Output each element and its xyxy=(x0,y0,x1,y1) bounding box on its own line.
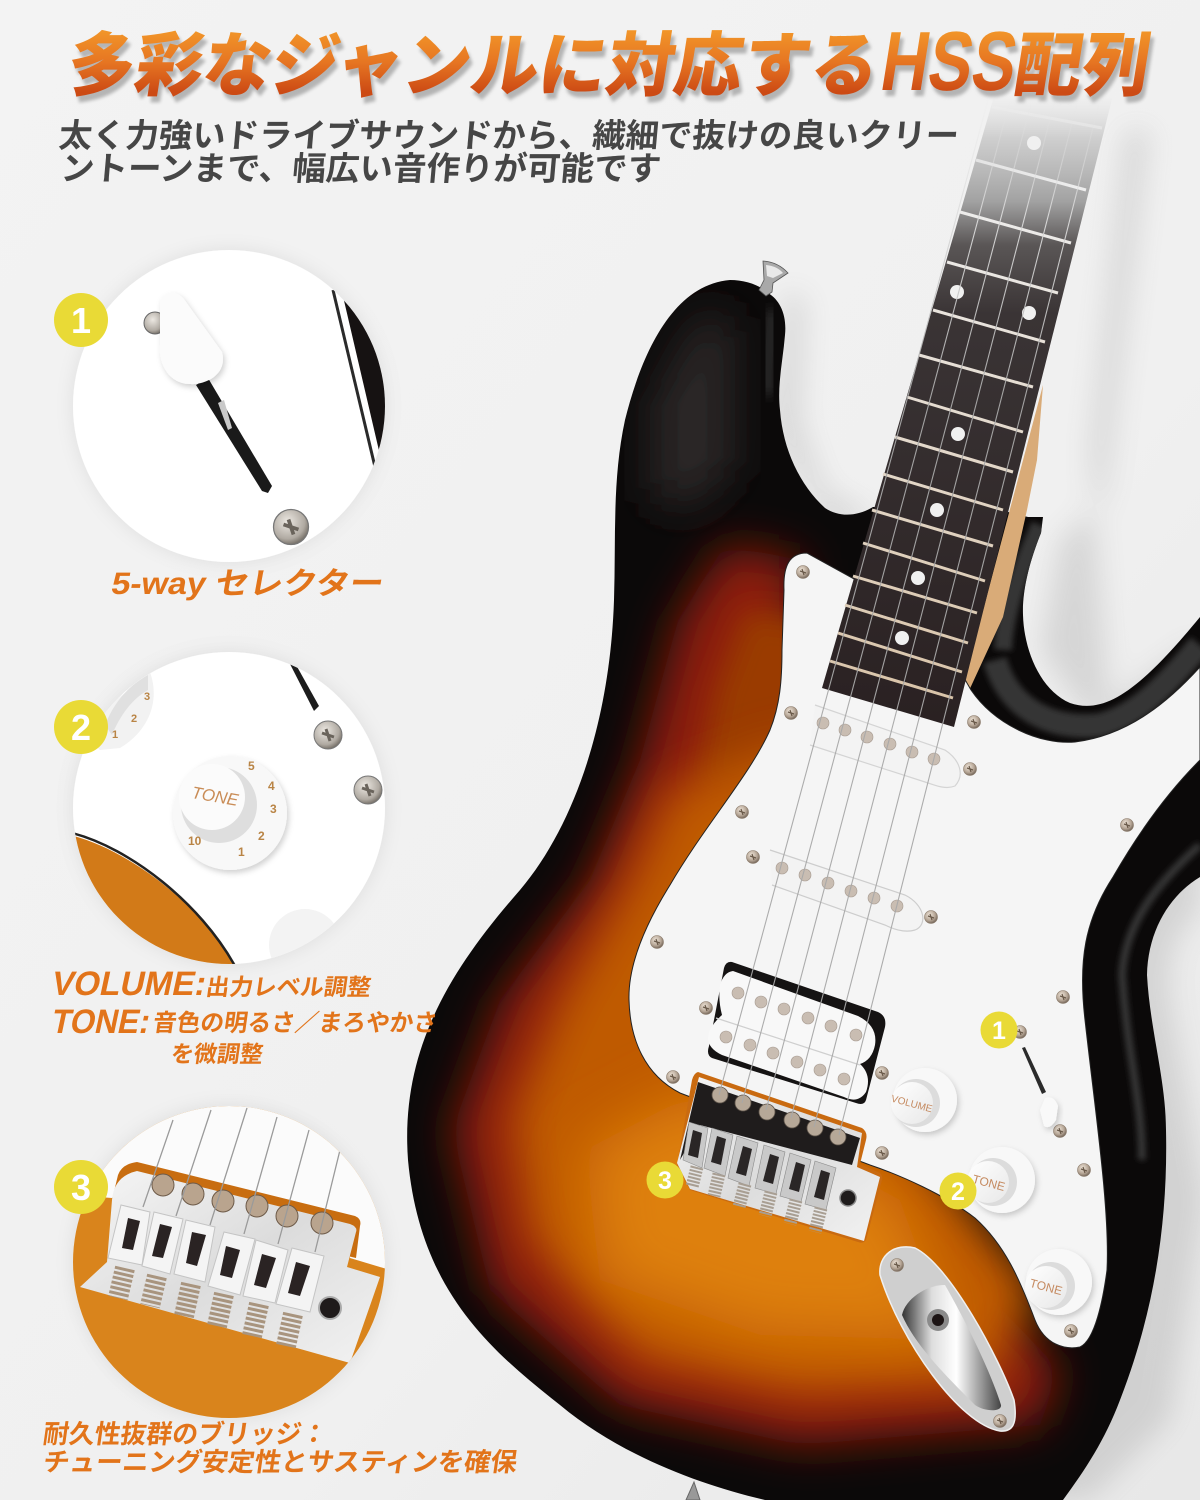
tone knob skirt xyxy=(181,767,257,843)
knob numbers: 2 xyxy=(258,829,265,843)
bridge label: 耐久性抜群のブリッジ： xyxy=(41,1419,329,1449)
saddle slots xyxy=(122,1218,310,1296)
subtitle: 太く力強いドライブサウンドから、繊細で抜けの良いクリー xyxy=(57,117,961,155)
neck wood side xyxy=(952,385,1043,727)
wall shadow of guitar xyxy=(770,130,1200,1500)
badge 1 xyxy=(54,293,108,347)
fret position dots xyxy=(895,136,1041,645)
bridge rim xyxy=(112,1162,360,1258)
guitar badge 2 xyxy=(940,1172,976,1210)
volume tone label: VOLUME: xyxy=(48,965,210,1003)
badge 1: 1 xyxy=(71,300,91,341)
detail circle 1: selector xyxy=(73,250,400,562)
badge 3: 3 xyxy=(71,1167,91,1208)
strings xyxy=(719,100,1100,1135)
pickup selector xyxy=(1022,1047,1058,1127)
tone knob two: TONE xyxy=(1028,1276,1064,1298)
volume knob: VOLUME xyxy=(890,1094,934,1115)
lever metal xyxy=(218,400,232,430)
guitar badge 3: 3 xyxy=(658,1167,672,1195)
guitar illustration xyxy=(390,0,1200,1500)
partial knob numbers: 3 xyxy=(144,691,150,703)
tone knob base xyxy=(173,756,287,870)
title: 配列 xyxy=(1010,26,1156,105)
small screw xyxy=(144,312,160,334)
volume tone label: を微調整 xyxy=(169,1041,265,1067)
guitar body xyxy=(390,260,1200,1500)
volume tone label: 音色の明るさ／まろやかさ xyxy=(151,1010,439,1037)
pickguard screws xyxy=(650,566,1134,1338)
bridge label: チューニング安定性とサスティンを確保 xyxy=(41,1447,519,1477)
saddle blocks xyxy=(108,1205,324,1312)
subtitle xyxy=(57,117,961,188)
guitar badge 3 xyxy=(646,1162,684,1198)
humbucker pickup xyxy=(708,962,885,1104)
bridge label xyxy=(41,1419,519,1477)
tone knob cap: TONE xyxy=(190,783,240,810)
partial knob bottom xyxy=(269,909,334,958)
partial knob top left xyxy=(98,674,154,750)
neck pickup xyxy=(810,705,960,787)
guitar badge 2: 2 xyxy=(951,1178,965,1206)
knob numbers: 3 xyxy=(270,802,277,816)
strap button top xyxy=(759,261,788,296)
selector label: 5-way セレクター xyxy=(109,566,387,601)
pickguard edge xyxy=(72,833,235,966)
saddle slots xyxy=(688,1130,830,1200)
tone knob one: TONE xyxy=(971,1172,1007,1194)
knob numbers: 5 xyxy=(248,759,255,773)
guitar badge 1 xyxy=(980,1012,1018,1048)
slot xyxy=(290,663,319,711)
pickguard edge line xyxy=(333,290,375,467)
volume knob xyxy=(890,1068,957,1132)
volume tone label xyxy=(48,965,439,1067)
pickguard xyxy=(629,553,1200,1348)
subtitle: ントーンまで、幅広い音作りが可能です xyxy=(59,150,663,188)
bridge xyxy=(677,1072,882,1243)
knob numbers: 1 xyxy=(238,845,245,859)
detail circle 2: knobs xyxy=(70,652,385,981)
screw xyxy=(354,776,382,804)
badge 3 xyxy=(54,1160,108,1214)
lever slot xyxy=(196,378,272,493)
volume tone label: TONE: xyxy=(48,1003,154,1041)
bridge strings xyxy=(143,1108,340,1252)
tone knob two xyxy=(1025,1249,1092,1315)
middle pickup xyxy=(770,850,923,931)
volume tone label: 出力レベル調整 xyxy=(204,974,373,1000)
knob numbers: 4 xyxy=(268,779,275,793)
saddle blocks xyxy=(683,1122,836,1210)
bridge hole xyxy=(319,1297,341,1319)
frets xyxy=(830,107,1102,698)
pickguard area xyxy=(102,1106,385,1268)
saddle springs xyxy=(692,1167,821,1232)
guitar badge 1: 1 xyxy=(992,1017,1006,1045)
tone knob cap xyxy=(179,764,245,830)
knob numbers: 10 xyxy=(188,834,202,848)
title xyxy=(62,13,1156,108)
badge 2: 2 xyxy=(71,707,91,748)
orange body segment xyxy=(70,835,235,965)
saddle top screws xyxy=(712,1087,846,1145)
black binding highlights xyxy=(767,310,1200,1160)
partial knob numbers: 2 xyxy=(131,713,137,725)
partial knob numbers: 1 xyxy=(112,729,118,741)
output jack plate xyxy=(880,1247,1015,1431)
detail circle 3: bridge xyxy=(72,1104,386,1420)
intonation springs xyxy=(118,1268,293,1346)
body edge xyxy=(344,300,385,450)
badge 2 xyxy=(54,700,108,754)
title: 多彩なジャンルに対応する xyxy=(62,26,885,105)
lever tip xyxy=(160,293,223,384)
strap button bottom xyxy=(686,1482,700,1500)
tone knob one xyxy=(967,1147,1035,1213)
screw xyxy=(274,510,308,544)
saddle screws xyxy=(152,1174,333,1234)
fretboard xyxy=(822,0,1137,727)
title: HSS xyxy=(875,13,1024,108)
screw xyxy=(314,721,342,749)
bridge plate xyxy=(80,1171,380,1363)
